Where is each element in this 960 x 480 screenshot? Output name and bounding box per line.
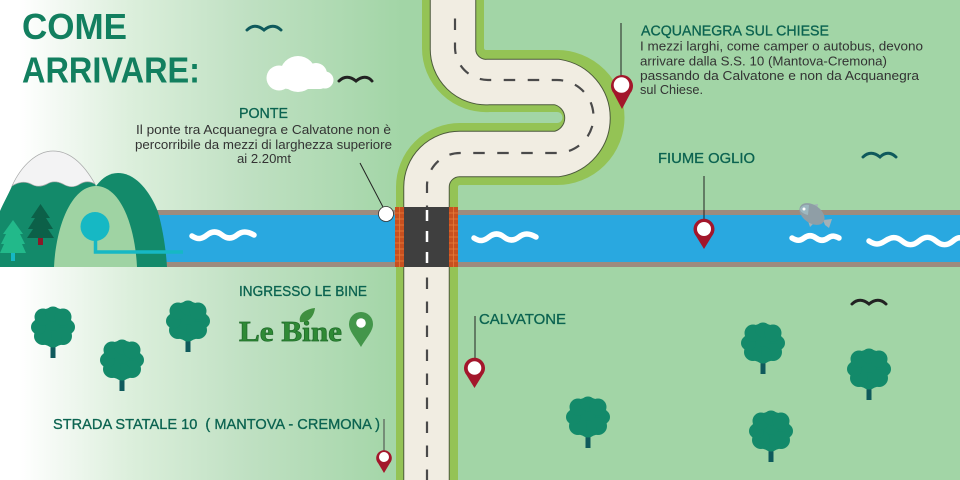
label: acquanegra: sul Chiese. [640, 83, 703, 97]
front mountain [54, 186, 137, 267]
icon: fish [795, 199, 832, 229]
pin: fiume oglio [694, 176, 715, 249]
label: strada statale: STRADA STATALE 10 ( MANTOVA - CREMONA ) [53, 416, 380, 433]
logo: le bine: Le Bine [239, 316, 342, 348]
title: ARRIVARE: [22, 50, 200, 90]
label: acquanegra: I mezzi larghi, come camper o autobus, devono [640, 40, 923, 54]
river [150, 210, 960, 267]
pin: strada statale [376, 419, 392, 473]
road edge [426, 0, 587, 480]
label: ingresso le bine: INGRESSO LE BINE [239, 283, 367, 300]
label: ponte: Il ponte tra Acquanegra e Calvatone non è [136, 123, 391, 137]
label: ponte: percorribile da mezzi di larghezza superiore [135, 138, 392, 152]
label: acquanegra: arrivare dalla S.S. 10 (Mantova-Cremona) [640, 54, 887, 68]
pin: calvatone [464, 316, 485, 388]
road centre line [427, 6, 593, 480]
cloud [266, 56, 334, 92]
road [426, 0, 593, 480]
road verge [427, 0, 593, 480]
light pine [0, 220, 26, 261]
pin: acquanegra [611, 23, 633, 109]
river waves [192, 232, 960, 245]
snow cap [12, 151, 95, 187]
back mountain [0, 151, 96, 267]
title [22, 6, 200, 90]
label: calvatone: CALVATONE [479, 311, 566, 328]
label: acquanegra [640, 22, 923, 97]
bridge [395, 207, 458, 267]
birds [247, 26, 896, 304]
right mountain [96, 173, 167, 267]
title: COME [22, 6, 127, 47]
entrance marker [80, 212, 183, 252]
dark pine [27, 204, 54, 245]
label: ponte: PONTE [239, 105, 288, 122]
icon: leaf [300, 308, 315, 322]
road surface [426, 0, 587, 480]
label: fiume oglio: FIUME OGLIO [658, 150, 755, 167]
label: acquanegra: ACQUANEGRA SUL CHIESE [641, 22, 829, 40]
marker: ponte [360, 163, 394, 222]
logo: le bine [239, 308, 373, 348]
label: ponte: ai 2.20mt [237, 152, 292, 166]
label: acquanegra: passando da Calvatone e non da Acquanegra [640, 69, 919, 83]
mountains [0, 151, 183, 267]
trees [31, 300, 891, 462]
icon: location pin [349, 312, 373, 347]
label: ponte [135, 105, 392, 166]
